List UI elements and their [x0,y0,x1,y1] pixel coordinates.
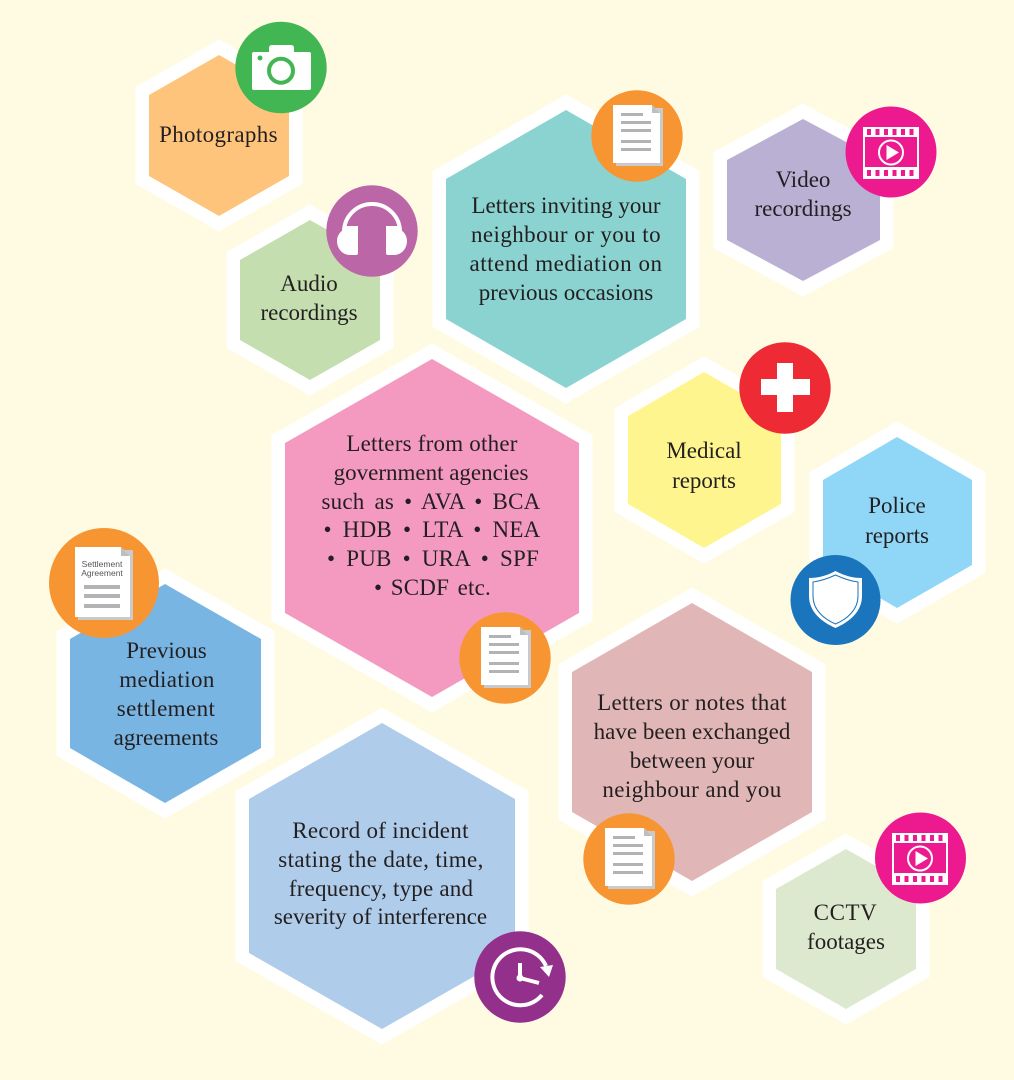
label: cctv footages: footages [807,929,885,954]
icon: camera [235,22,327,113]
label: previous settlement agreements: Previous [126,638,207,663]
label: government agencies: such as • AVA • BCA [321,489,541,514]
panel: previous settlement agreements [49,528,261,803]
icon: settlement agreement document: Settlement [82,559,123,569]
label: audio recordings: recordings [260,300,358,325]
label: letters or notes: have been exchanged [594,719,791,744]
label: audio recordings: Audio [280,271,338,296]
label: government agencies: • PUB • URA • SPF [327,546,539,571]
label: government agencies: • SCDF etc. [374,575,491,600]
label: medical reports: reports [672,468,736,493]
label: government agencies: government agencies [334,460,528,485]
panel: letters or notes exchanged [572,603,812,905]
label: previous settlement agreements: mediation [119,667,215,692]
label: record of incident: severity of interference [274,904,487,929]
icon: headphones [326,185,418,277]
panel: police reports [790,437,972,645]
icon: document [591,90,683,182]
icon: medical cross [739,342,831,434]
icon: film [846,106,936,198]
label: record of incident: Record of incident [292,818,469,843]
panel: letters inviting to mediation [446,90,686,388]
label: previous settlement agreements: settlement [117,696,215,721]
label: previous settlement agreements: agreements [114,725,218,750]
icon: shield [790,555,880,645]
label: video recordings: recordings [754,196,852,221]
icon: document [583,813,675,905]
label: letters inviting: neighbour or you to [471,222,661,247]
label: letters inviting: Letters inviting your [471,193,661,218]
label: record of incident: frequency, type and [289,876,473,901]
label: government agencies: • HDB • LTA • NEA [324,517,541,542]
icon: film [875,812,966,904]
icon: document [459,612,551,704]
label: letters or notes: neighbour and you [602,777,782,802]
label: photographs: Photographs [159,122,278,147]
label: government agencies: Letters from other [346,431,518,456]
panel: video recordings [727,106,936,281]
panel: medical reports [628,342,831,548]
label: letters inviting: attend mediation on [469,251,663,276]
label: record of incident: stating the date, time, [278,847,484,872]
label: letters inviting: previous occasions [479,280,653,305]
panel: record of incident [249,723,566,1029]
panel: letters from government agencies [285,359,579,704]
label: video recordings: Video [776,167,830,192]
label: police reports: reports [865,523,929,548]
icon: settlement agreement document [49,528,159,638]
icon: clock [474,931,566,1023]
icon: settlement agreement document: Agreement [81,568,123,578]
label: medical reports: Medical [666,438,742,463]
label: letters or notes: Letters or notes that [597,690,787,715]
label: police reports: Police [868,493,926,518]
label: letters or notes: between your [630,748,755,773]
panel: cctv footages [776,812,966,1009]
label: cctv footages: CCTV [814,900,877,925]
panel: audio recordings [240,185,418,380]
panel: photographs [149,22,327,216]
